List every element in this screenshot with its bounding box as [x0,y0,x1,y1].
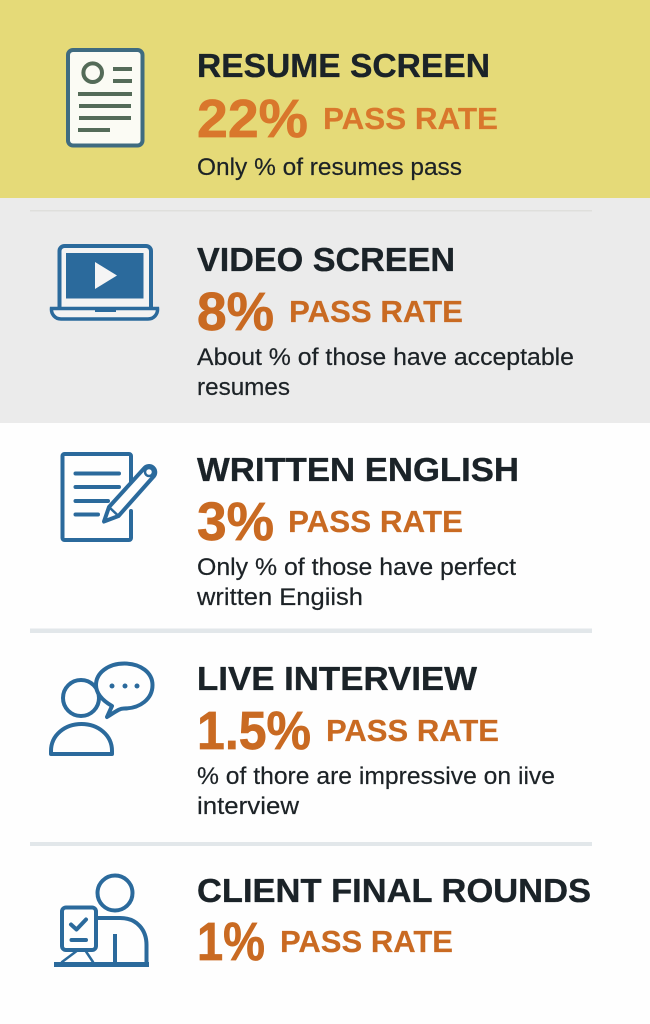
heading: client final rounds: CLIENT FINAL ROUNDS [197,872,591,909]
icon: laptop with play button [51,246,158,319]
description: video screen [197,344,574,401]
description: video screen: About % of those have acceptable [197,344,574,371]
panel: client final rounds [54,872,591,972]
label: pass rate: PASS RATE [326,713,499,748]
icon: person at monitor with checkmark [54,876,149,967]
heading: live interview: LIVE INTERVIEW [197,660,478,697]
description: live interview [197,763,555,820]
panel: resume screen [0,0,650,198]
heading: resume screen: RESUME SCREEN [197,47,490,84]
description: written english [196,554,516,611]
description: live interview: % of thore are impressive on iive [197,763,555,790]
description: resume screen: Only % of resumes pass [197,154,462,181]
description: written english: Only % of those have perfect [197,554,516,581]
label: pass rate: PASS RATE [323,101,498,136]
icon: person with speech bubble [51,664,152,754]
stat: 1 percent: 1% [197,912,265,972]
stat: 3 percent: 3% [197,492,274,552]
label: pass rate: PASS RATE [289,294,463,329]
heading: written english: WRITTEN ENGLISH [197,451,519,488]
description: video screen: resumes [197,374,290,401]
panel: live interview [30,660,592,846]
panel: video screen [0,198,650,423]
label: pass rate: PASS RATE [288,504,463,539]
description: live interview: interview [197,793,300,820]
icon: resume document [68,50,142,146]
stat: 8 percent: 8% [197,282,274,342]
icon: document and pencil [62,454,155,540]
panel: written english [30,451,592,633]
heading: video screen: VIDEO SCREEN [197,241,455,278]
stat: 22 percent: 22% [197,89,308,149]
description: written english: written Engiish [196,584,363,611]
stat: 1.5 percent: 1.5% [197,701,311,761]
label: pass rate: PASS RATE [280,924,453,959]
